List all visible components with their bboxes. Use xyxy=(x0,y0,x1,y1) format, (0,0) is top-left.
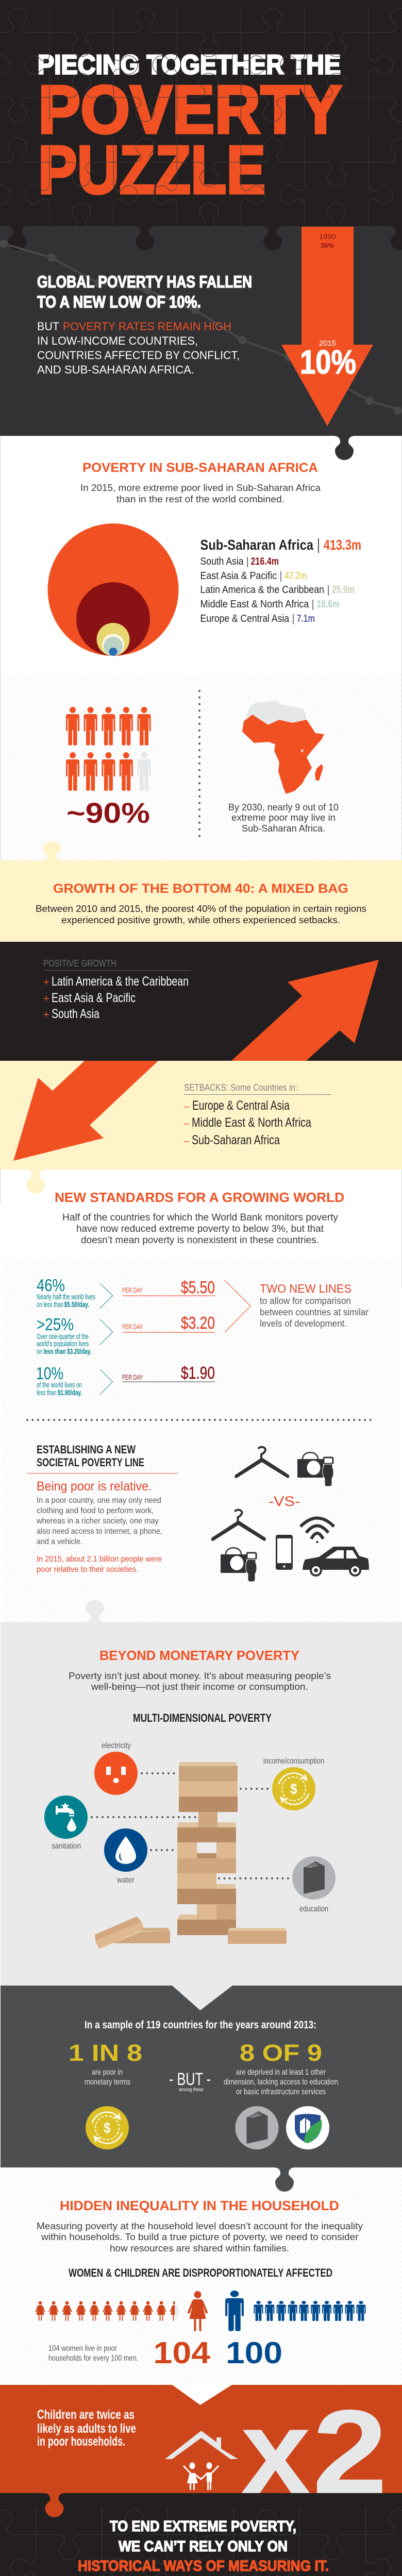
jenga tower xyxy=(95,1762,287,1949)
poverty line: 3.20 per day: PER DAY xyxy=(122,1323,143,1331)
caption: by 2030: Sub-Saharan Africa. xyxy=(242,823,325,834)
intro text: In 2015, more extreme poor lived in Sub-Saharan Africa xyxy=(80,483,321,493)
text block: in poor households. xyxy=(37,2434,125,2449)
headline: to end extreme poverty: HISTORICAL WAYS OF MEASURING IT. xyxy=(78,2558,329,2574)
caption: by 2030 xyxy=(228,802,339,834)
legend: regional poverty counts: Sub-Saharan Africa xyxy=(200,537,313,553)
divider text: but among these xyxy=(169,2070,211,2093)
panel: sample of 119 countries xyxy=(1,1986,402,2167)
legend: regional poverty counts: Europe & Central Asia xyxy=(200,613,290,624)
label: positive growth: POSITIVE GROWTH xyxy=(43,958,116,969)
stat: 46% xyxy=(37,1276,95,1309)
poverty line: 3.20 per day: $3.20 xyxy=(181,1313,215,1332)
heading: societal poverty line: ESTABLISHING A NEW xyxy=(37,1443,136,1456)
heading: GROWTH OF THE BOTTOM 40: A MIXED BAG xyxy=(53,882,348,896)
legend: regional poverty counts: 47.2m xyxy=(284,570,307,582)
stat: 46%: on less than xyxy=(37,1300,63,1309)
caption: 104 women: 104 women live in poor xyxy=(48,2344,118,2353)
panel: conclusion xyxy=(0,2493,402,2576)
icon: wifi xyxy=(300,1518,334,1543)
label: 10%: 10% xyxy=(300,343,356,381)
list: setback regions xyxy=(184,1098,311,1147)
caption: deprived in another dimension: are deprived in at least 1 other xyxy=(236,2068,326,2077)
legend: regional poverty counts: 25.9m xyxy=(332,584,355,596)
panel: beyond monetary poverty xyxy=(1,1600,402,1986)
line chart: poverty trend xyxy=(0,240,402,415)
caption: poor in monetary terms xyxy=(85,2068,130,2087)
dimension: income and consumption xyxy=(241,1757,324,1810)
intro text: Poverty isn’t just about money. It’s about measuring people’s xyxy=(69,1671,331,1681)
intro text xyxy=(37,2221,363,2253)
intro text: well-being—not just their income or consumption. xyxy=(91,1682,308,1692)
callout: two new lines xyxy=(260,1282,368,1329)
icon: book xyxy=(235,2106,278,2149)
heading: HIDDEN INEQUALITY IN THE HOUSEHOLD xyxy=(60,2198,339,2213)
caption: deprived in another dimension: dimension, lacking access to education xyxy=(224,2078,338,2087)
subheading: being poor is relative: Being poor is relative. xyxy=(37,1479,152,1494)
panel: new standards for a growing world xyxy=(2,1170,400,1622)
poverty line: 5.50 per day: PER DAY xyxy=(122,1286,143,1294)
list: positive regions: + xyxy=(43,993,49,1005)
text block: poverty rates remain high: COUNTRIES AFFECTED BY CONFLICT, xyxy=(37,349,240,362)
caption: deprived in another dimension: or basic infrastructure services xyxy=(236,2088,326,2096)
label: 36%: 36% xyxy=(321,242,334,249)
pictogram: men xyxy=(225,2291,365,2331)
title: puzzle: PUZZLE xyxy=(38,132,265,208)
text block: likely as adults to live xyxy=(37,2421,136,2436)
stat: more than 25%: >25% xyxy=(37,1315,74,1334)
callout: two new lines: TWO NEW LINES xyxy=(260,1282,351,1295)
icon: food, rich society xyxy=(221,1548,257,1582)
stat: 104: 104 xyxy=(154,2336,210,2370)
list: positive regions: + xyxy=(43,977,49,988)
stat: 10%: less than xyxy=(37,1388,57,1397)
legend: regional poverty counts: South Asia xyxy=(200,556,244,567)
icon: food, poor country xyxy=(297,1452,333,1486)
dimension: income and consumption: income/consumption xyxy=(263,1757,324,1766)
panel: setbacks xyxy=(0,1061,402,1170)
body text: clothing and food to perform work, xyxy=(37,1506,154,1515)
list: setback regions: Europe & Central Asia xyxy=(192,1098,290,1113)
callout: two new lines: to allow for comparison xyxy=(260,1296,351,1306)
divider text: but among these: among these xyxy=(179,2087,204,2093)
label: versus: -VS- xyxy=(269,1494,300,1509)
list: setback regions: Middle East & North Africa xyxy=(192,1115,311,1130)
callout: 2.1 billion: In 2015, about 2.1 billion people were xyxy=(37,1555,162,1564)
panel: global poverty has fallen xyxy=(0,226,402,436)
caption: by 2030: By 2030, nearly 9 out of 10 xyxy=(228,802,339,812)
label: 1990: 1990 xyxy=(319,232,336,241)
heading: societal poverty line: SOCIETAL POVERTY LINE xyxy=(37,1456,144,1469)
intro text xyxy=(36,904,366,925)
heading: POVERTY IN SUB-SAHARAN AFRICA xyxy=(82,461,318,475)
heading: global poverty xyxy=(37,273,252,311)
intro text: how resources are shared within families. xyxy=(110,2243,289,2253)
stat: 10%: 10% xyxy=(36,1364,63,1383)
arrow: poverty falling xyxy=(281,227,373,426)
panel: growth of the bottom 40 xyxy=(0,841,402,942)
arrow: down left xyxy=(13,1061,158,1161)
heading: BEYOND MONETARY POVERTY xyxy=(99,1648,299,1663)
stat: more than 25%: Over one-quarter of the xyxy=(37,1332,89,1341)
pictogram: women xyxy=(35,2291,208,2331)
legend: regional poverty counts: 7.1m xyxy=(297,613,315,624)
dimension: education: education xyxy=(299,1905,328,1913)
caption: deprived in another dimension xyxy=(224,2068,338,2096)
dimension: water: water xyxy=(116,1876,135,1885)
heading: NEW STANDARDS FOR A GROWING WORLD xyxy=(55,1190,344,1205)
headline: to end extreme poverty: WE CAN’T RELY ONLY ON xyxy=(119,2538,288,2555)
list: positive regions: + xyxy=(43,1009,49,1021)
stat: 1 in 8: 1 IN 8 xyxy=(69,2040,142,2066)
heading: In a sample of 119 countries for the years around 2013: xyxy=(85,2019,316,2031)
panel: poverty in sub-saharan africa xyxy=(0,436,402,1288)
poverty line: 5.50 per day xyxy=(122,1278,215,1297)
title: poverty: POVERTY xyxy=(38,72,342,147)
stat: 10%: $1.90/day. xyxy=(58,1388,82,1397)
headline: to end extreme poverty: TO END EXTREME POVERTY, xyxy=(110,2518,296,2535)
stat: 46%: Nearly half the world lives xyxy=(37,1293,95,1301)
poverty line: 3.20 per day xyxy=(122,1313,215,1333)
dimension: water xyxy=(104,1828,173,1885)
intro text: than in the rest of the world combined. xyxy=(116,494,284,504)
intro text: Half of the countries for which the World Bank monitors poverty xyxy=(62,1212,338,1223)
body text: In a poor country, one may only need xyxy=(37,1496,161,1505)
arrow: up right xyxy=(231,960,379,1061)
text block: poverty rates remain high xyxy=(37,320,240,376)
dimension: sanitation xyxy=(44,1795,195,1851)
stat: more than 25%: world’s population lives xyxy=(36,1340,89,1348)
heading: global poverty: GLOBAL POVERTY HAS FALLEN xyxy=(37,273,252,291)
intro text: Measuring poverty at the household level doesn’t account for the inequality xyxy=(37,2221,363,2231)
callout: two new lines: levels of development. xyxy=(260,1318,347,1329)
stat: about 90%: ~90% xyxy=(66,796,150,829)
stat: 46%: $5.50/day. xyxy=(64,1300,89,1309)
intro text: Between 2010 and 2015, the poorest 40% of the population in certain regions xyxy=(36,904,366,914)
intro text: experienced positive growth, while others experienced setbacks. xyxy=(61,915,340,925)
dimension: education xyxy=(219,1856,336,1913)
body text: also need access to internet, a phone, xyxy=(37,1527,162,1536)
list: positive regions xyxy=(43,974,189,1021)
pictogram: nine of ten people xyxy=(66,707,151,791)
poverty line: 5.50 per day: $5.50 xyxy=(181,1278,215,1297)
text block: Children are twice as xyxy=(37,2408,135,2422)
body text: whereas in a richer society, one may xyxy=(36,1517,159,1526)
headline: to end extreme poverty xyxy=(78,2518,329,2574)
panel: hidden inequality in the household xyxy=(0,2167,402,2385)
dimension: sanitation: sanitation xyxy=(52,1842,81,1851)
text block: poverty rates remain high: BUT xyxy=(37,320,59,333)
text block: poverty rates remain high: POVERTY RATES REMAIN HIGH xyxy=(63,320,231,333)
chevron: two new lines xyxy=(224,1280,250,1332)
legend: regional poverty counts: 413.3m xyxy=(324,537,361,553)
stat: 10% xyxy=(36,1364,82,1397)
legend: regional poverty counts xyxy=(200,537,361,624)
panel: title header xyxy=(0,0,402,227)
caption: poor in monetary terms: are poor in xyxy=(92,2068,123,2077)
heading: global poverty: TO A NEW LOW OF 10%. xyxy=(37,293,201,311)
text block xyxy=(37,2408,136,2449)
subheading: multi-dimensional poverty: MULTI-DIMENSIONAL POVERTY xyxy=(133,1711,272,1724)
legend: regional poverty counts: Middle East & North Africa xyxy=(200,599,309,610)
stat: more than 25%: less than $3.20/day. xyxy=(43,1347,91,1356)
intro text: within households. To build a true picture of poverty, we need to consider xyxy=(41,2232,358,2242)
icon: phone xyxy=(276,1535,293,1570)
caption: 104 women: households for every 100 men. xyxy=(48,2354,138,2363)
icon: car xyxy=(303,1547,369,1577)
dimension: electricity: electricity xyxy=(102,1741,131,1750)
dimension: electricity xyxy=(94,1741,174,1795)
callout: 2.1 billion xyxy=(37,1555,162,1574)
chart: nested proportional circles xyxy=(47,523,178,656)
intro text: have now reduced extreme poverty to below 3%, but that xyxy=(76,1224,324,1234)
icon: hanger, rich society xyxy=(211,1510,266,1541)
icon: coin xyxy=(86,2106,129,2149)
caption: 104 women xyxy=(48,2344,138,2363)
stat: times two: 2 xyxy=(312,2385,388,2519)
panel: positive growth xyxy=(0,942,402,1061)
intro text: doesn’t mean poverty is nonexistent in these countries. xyxy=(81,1235,319,1246)
legend: regional poverty counts: 216.4m xyxy=(250,556,279,567)
stat: 46%: 46% xyxy=(37,1276,65,1295)
panel: children twice as likely xyxy=(0,2385,402,2519)
heading: societal poverty line xyxy=(37,1443,144,1469)
divider text: but among these: - BUT - xyxy=(169,2070,211,2089)
stat: more than 25% xyxy=(36,1315,91,1356)
icon: infrastructure shield xyxy=(286,2106,329,2149)
map: africa xyxy=(242,700,324,794)
list: positive regions: East Asia & Pacific xyxy=(52,991,136,1005)
title: piecing together the: PIECING TOGETHER THE xyxy=(38,49,341,80)
legend: regional poverty counts: Latin America & the Caribbean xyxy=(200,584,324,596)
text block: poverty rates remain high: IN LOW-INCOME COUNTRIES, xyxy=(37,334,198,347)
poverty line: 1.90 per day xyxy=(122,1363,215,1382)
legend: regional poverty counts: East Asia & Pacific xyxy=(200,570,277,582)
body text xyxy=(36,1496,162,1546)
icon: hanger, poor country xyxy=(234,1447,289,1478)
stat: more than 25%: on xyxy=(37,1347,42,1356)
intro text xyxy=(80,483,321,504)
callout: two new lines: between countries at similar xyxy=(260,1307,368,1317)
stat: 100: 100 xyxy=(226,2336,282,2370)
caption: by 2030: extreme poor may live in xyxy=(231,812,336,823)
intro text xyxy=(69,1671,331,1692)
poverty line: 1.90 per day: $1.90 xyxy=(181,1363,215,1382)
poverty line: 1.90 per day: PER DAY xyxy=(122,1373,143,1381)
caption: poor in monetary terms: monetary terms xyxy=(85,2078,130,2087)
body text: and a vehicle. xyxy=(37,1537,82,1546)
stat: times two: x xyxy=(241,2385,311,2519)
list: positive regions: Latin America & the Caribbean xyxy=(52,974,189,989)
icon: house with children xyxy=(165,2431,238,2490)
list: setback regions: Sub-Saharan Africa xyxy=(192,1133,280,1147)
legend: regional poverty counts: 18.6m xyxy=(316,599,340,610)
list: positive regions: South Asia xyxy=(52,1007,99,1021)
label: setbacks: SETBACKS: Some Countries in: xyxy=(184,1082,297,1093)
stat: times two xyxy=(241,2385,388,2519)
label: 2015: 2015 xyxy=(319,339,336,348)
subheading: women and children: WOMEN & CHILDREN ARE DISPROPORTIONATELY AFFECTED xyxy=(69,2266,332,2279)
intro text xyxy=(62,1212,338,1246)
text block: poverty rates remain high: AND SUB-SAHARAN AFRICA. xyxy=(37,363,194,376)
callout: 2.1 billion: poor relative to their societies. xyxy=(37,1565,138,1574)
stat: 8 of 9: 8 OF 9 xyxy=(240,2040,322,2066)
stat: 10%: of the world lives on xyxy=(37,1381,82,1389)
chevrons: stats to lines xyxy=(100,1283,112,1395)
